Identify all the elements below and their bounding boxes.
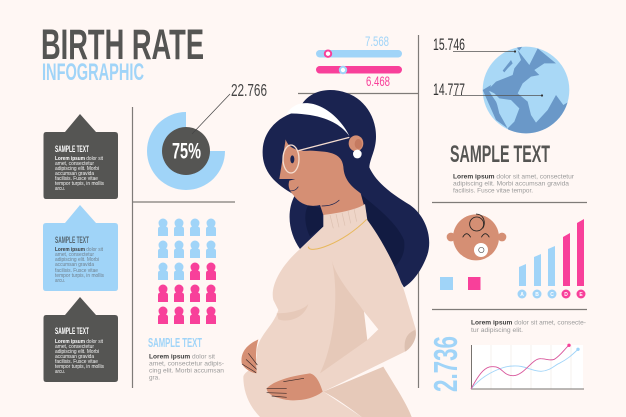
globe xyxy=(434,38,570,134)
donut chart 75%: 75% xyxy=(172,138,201,164)
panel: blue callout middle: tempor turpis, in mollis xyxy=(55,273,104,279)
text block: sample text under globe: adipiscing elit. Morbi accumsan gravida xyxy=(453,180,569,188)
panel: dark callout top: Lorem ipsum dolor sit xyxy=(55,156,104,162)
panel: dark callout bottom: arcu. xyxy=(55,369,65,375)
panel: dark callout top xyxy=(44,114,118,199)
panel: dark callout top: facilisis. Fusce vitae xyxy=(55,176,98,182)
big number: 2.736 xyxy=(427,336,464,392)
text block: sample text under pictogram: cing elit. Morbi accumsan xyxy=(149,367,224,374)
slider chart xyxy=(316,33,402,89)
panel: dark callout bottom: tempor turpis, in mollis xyxy=(55,364,104,370)
text block: sample text under globe: SAMPLE TEXT xyxy=(450,141,550,168)
panel: dark callout top: arcu. xyxy=(55,186,65,192)
panel: blue callout middle: Lorem ipsum dolor sit xyxy=(55,247,104,253)
text block: sample text under globe xyxy=(450,141,575,194)
panel: dark callout top: SAMPLE TEXT xyxy=(55,144,89,154)
panel: blue callout middle: adipiscing elit. Morbi xyxy=(55,257,99,263)
panel: dark callout bottom: facilisis. Fusce vitae xyxy=(55,359,98,365)
panel: dark callout bottom: adipiscing elit. Morbi xyxy=(55,349,99,355)
panel: dark callout bottom: Lorem ipsum dolor sit xyxy=(55,339,104,345)
pictogram: people grid xyxy=(158,218,216,324)
panel: dark callout bottom: amet, consectetur xyxy=(55,344,94,350)
panel: dark callout top: adipiscing elit. Morbi xyxy=(55,166,99,172)
title xyxy=(41,21,204,86)
bar chart: C xyxy=(550,292,554,298)
donut chart 75% xyxy=(147,80,267,190)
subtitle: INFOGRAPHIC xyxy=(42,59,144,86)
text block: sample text under pictogram: gra. xyxy=(149,374,160,381)
panel: blue callout middle xyxy=(43,205,118,291)
text block: sample text under pictogram: Lorem ipsum dolor sit xyxy=(149,353,215,360)
panel: dark callout top: accumsan gravida xyxy=(55,171,94,177)
text block: sample text under globe: facilisis. Fusce vitae tempor. xyxy=(453,188,533,194)
slider chart: 6.468 xyxy=(366,73,390,89)
bar chart: E xyxy=(579,292,583,298)
panel: blue callout middle: SAMPLE TEXT xyxy=(55,235,89,245)
illustration: pregnant woman xyxy=(241,90,429,417)
panel: dark callout bottom: SAMPLE TEXT xyxy=(55,326,89,336)
line chart xyxy=(471,344,584,389)
panel: dark callout bottom: accumsan gravida xyxy=(55,354,94,360)
slider chart: 7.568 xyxy=(365,33,389,49)
text block: sample text under pictogram: SAMPLE TEXT xyxy=(148,335,202,350)
bar chart: A xyxy=(520,292,524,298)
text block: line chart caption: Lorem ipsum dolor sit amet, consecte- xyxy=(471,319,586,326)
text block: sample text under pictogram: amet, consectetur adipis- xyxy=(149,360,224,367)
donut value: 22.766 xyxy=(231,80,267,100)
legend squares xyxy=(440,277,480,290)
text block: line chart caption xyxy=(471,319,586,334)
panel: dark callout bottom xyxy=(44,297,118,382)
bar chart xyxy=(518,219,586,298)
panel: blue callout middle: facilisis. Fusce vitae xyxy=(55,268,98,274)
bar chart: B xyxy=(535,292,539,298)
globe label bottom: 14.777 xyxy=(433,80,465,99)
panel: blue callout middle: arcu. xyxy=(55,278,65,284)
title: BIRTH RATE xyxy=(41,21,204,69)
panel: blue callout middle: accumsan gravida xyxy=(55,262,94,268)
text block: sample text under pictogram xyxy=(148,335,224,381)
globe label top: 15.746 xyxy=(433,35,465,54)
icon: baby face xyxy=(447,214,506,260)
panel: dark callout top: amet, consectetur xyxy=(55,161,94,167)
text block: sample text under globe: Lorem ipsum dolor sit amet, consectetur xyxy=(453,174,575,180)
bar chart: D xyxy=(564,292,568,298)
panel: dark callout top: tempor turpis, in mollis xyxy=(55,181,104,187)
panel: blue callout middle: amet, consectetur xyxy=(55,252,94,258)
text block: line chart caption: tur adipiscing elit. xyxy=(471,327,523,334)
